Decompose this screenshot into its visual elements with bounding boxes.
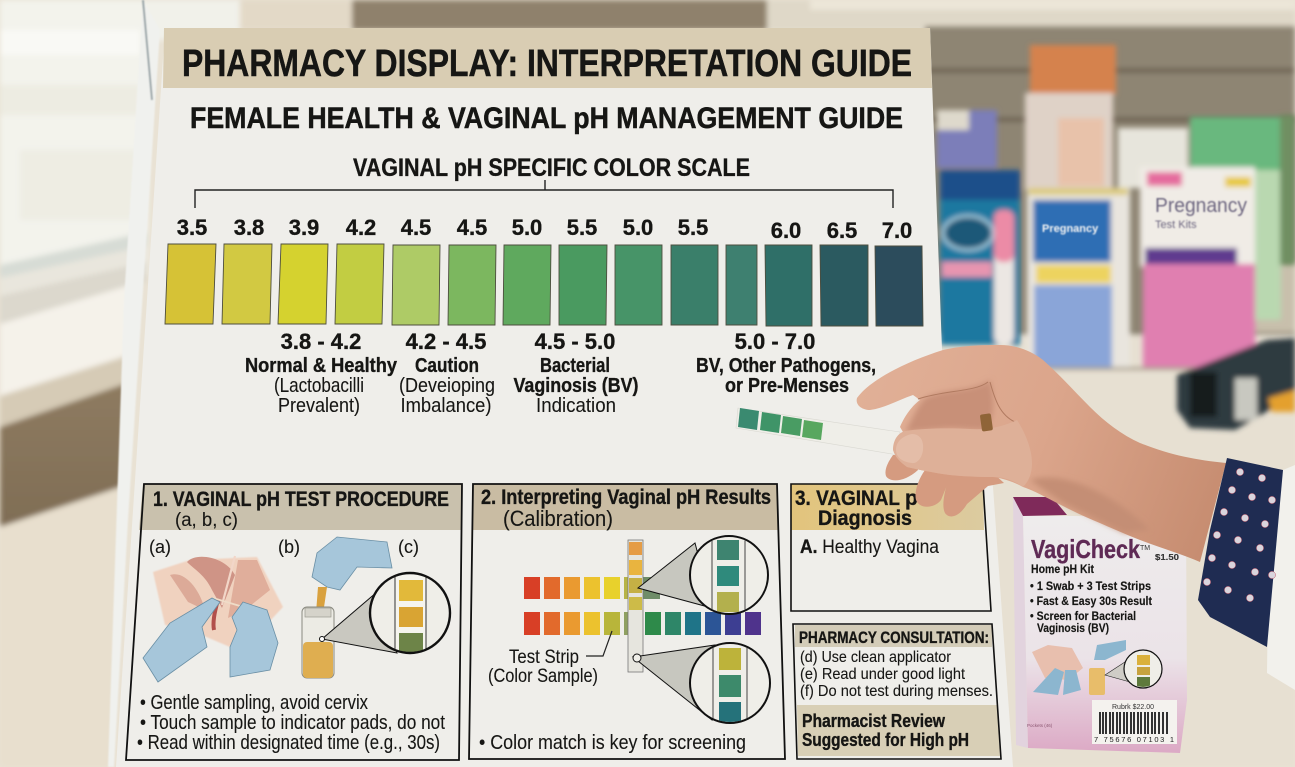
magnifier top: [638, 530, 768, 620]
thumbnail: [896, 434, 923, 463]
panel: pharmacy consultation: (e) Read under good light: [800, 666, 966, 683]
range: BV other pathogens: or Pre-Menses: [725, 375, 849, 397]
product box: VagiCheck: Home pH Kit: [1031, 564, 1094, 576]
display board: [116, 28, 1013, 767]
product box: VagiCheck: [1013, 497, 1187, 753]
panel 1: test procedure: • Read within designated time (e.g., 30s): [137, 732, 440, 754]
range: caution: [399, 329, 495, 417]
range: BV other pathogens: [696, 329, 876, 397]
crease shadows: [905, 380, 993, 432]
reference color rows: [524, 577, 761, 635]
pH values: 4.5: [401, 215, 431, 240]
icon: box illustration: [1032, 640, 1162, 695]
scanner: [1177, 338, 1295, 430]
pH values: 3.9: [289, 215, 319, 240]
pH values: 5.0: [512, 215, 542, 240]
range: caution: Imbalance): [400, 395, 492, 417]
panel 1: test procedure: 1. VAGINAL pH TEST PROCEDURE: [153, 488, 449, 511]
range: caution: (Deveioping: [399, 375, 495, 397]
pH values: 3.5: [177, 215, 207, 240]
palm and back of hand: [857, 345, 1226, 562]
blurred products on shelf: [937, 45, 1295, 430]
panel 1: test procedure: • Touch sample to indicator pads, do not: [140, 712, 445, 734]
pH values: 3.8: [234, 215, 264, 240]
range: bacterial vaginosis: 4.5 - 5.0: [535, 329, 615, 354]
panel 3: diagnosis: [791, 484, 991, 611]
label: test strip: [488, 631, 612, 687]
pH values: 6.5: [827, 218, 857, 243]
blurred shelf labels: Test Kits: [1155, 219, 1197, 231]
range: normal: (Lactobacilli: [274, 375, 364, 397]
wedding ring: [980, 413, 993, 432]
panel: pharmacy consultation: [793, 624, 1001, 759]
range: BV other pathogens: BV, Other Pathogens,: [696, 355, 876, 377]
thumb: [893, 420, 1032, 487]
panel 1: test procedure: (a): [149, 537, 171, 557]
range: bacterial vaginosis: Vaginosis (BV): [514, 375, 638, 397]
panel 1: test procedure: (b): [278, 537, 300, 557]
range: caution: Caution: [415, 355, 479, 377]
scale heading: VAGINAL pH SPECIFIC COLOR SCALE: [353, 154, 750, 182]
lower fingers: [885, 455, 1004, 516]
pH values: 6.0: [771, 218, 801, 243]
pH values: 5.5: [567, 215, 597, 240]
product box: VagiCheck: • Screen for Bacterial: [1030, 611, 1136, 623]
range: BV other pathogens: 5.0 - 7.0: [735, 329, 815, 354]
range: caution: 4.2 - 4.5: [406, 329, 486, 354]
range: normal: Prevalent): [278, 395, 360, 417]
blurred shelf labels: [1042, 195, 1247, 235]
bracket above scale: [195, 180, 893, 208]
product box: VagiCheck: VagiCheck: [1031, 534, 1140, 564]
label: test strip: (Color Sample): [488, 666, 598, 687]
icon: gloved hand and vial: [302, 537, 450, 678]
shirt cuff and sleeve: [1198, 458, 1295, 690]
panel 1: test procedure: (c): [398, 537, 419, 557]
magnifier bottom: [633, 640, 770, 725]
bullet list: • Gentle sampling, avoid cervix: [140, 692, 368, 714]
pH values: 4.2: [346, 215, 376, 240]
product box: VagiCheck: TM: [1140, 545, 1150, 552]
pH values: 5.0: [623, 215, 653, 240]
range: normal: [245, 329, 398, 417]
panel: pharmacy consultation: PHARMACY CONSULTATION:: [799, 629, 989, 647]
panel: pharmacy consultation: (f) Do not test during menses.: [800, 683, 993, 700]
range: bacterial vaginosis: Bacterial: [540, 355, 610, 377]
panel 2: interpreting results: 2. Interpreting Vaginal pH Results: [481, 486, 771, 509]
label: test strip: Test Strip: [509, 647, 579, 668]
barcode: 7 75676 07103 1: [1094, 735, 1174, 744]
sample test strip held: [736, 408, 900, 455]
product box: VagiCheck: • Fast & Easy 30s Result: [1030, 596, 1152, 608]
pH color scale: [165, 215, 923, 326]
icon: anatomy and gloved hands: [143, 556, 283, 682]
pH values: 7.0: [882, 218, 912, 243]
main title band: PHARMACY DISPLAY: INTERPRETATION GUIDE: [182, 43, 912, 85]
panel: pharmacy consultation: (d) Use clean applicator: [800, 649, 952, 666]
panel 1: test procedure: (a, b, c): [175, 510, 238, 531]
range: normal: 3.8 - 4.2: [281, 329, 361, 354]
acrylic stand edge: [108, 0, 160, 767]
range: normal: Normal & Healthy: [245, 355, 398, 377]
barcode: Rubrk $22.00: [1112, 704, 1154, 711]
panel 2: interpreting results: [469, 484, 785, 759]
finger outlines: [918, 382, 1015, 422]
panel 3: diagnosis: p: [905, 487, 918, 510]
panel: pharmacy consultation: Pharmacist Review: [802, 711, 946, 731]
panel: pharmacy consultation: Suggested for High pH: [802, 730, 969, 750]
product box: VagiCheck: Vaginosis (BV): [1037, 623, 1109, 635]
pH values: 4.5: [457, 215, 487, 240]
product box: VagiCheck: $1.50: [1155, 552, 1179, 562]
test strip: [628, 540, 643, 672]
blurred shelf labels: Pregnancy: [1155, 195, 1247, 217]
range: bacterial vaginosis: [514, 329, 638, 417]
panel 2: interpreting results: • Color match is key for screening: [479, 731, 746, 754]
color swatches: [165, 244, 923, 326]
panel 1: test procedure: [126, 484, 462, 760]
blurred shelf labels: Pregnancy: [1042, 223, 1099, 235]
main title band: [163, 28, 932, 88]
panel 3: diagnosis: A. Healthy Vagina: [800, 537, 939, 558]
hand holding strip: [857, 345, 1226, 562]
subtitle: FEMALE HEALTH & VAGINAL pH MANAGEMENT GUIDE: [190, 102, 903, 135]
range: bacterial vaginosis: Indication: [536, 395, 616, 417]
panel 3: diagnosis: Diagnosis: [818, 507, 912, 530]
panel 3: diagnosis: 3. VAGINAL: [795, 487, 900, 510]
pH values: 5.5: [678, 215, 708, 240]
pH values: [177, 215, 912, 243]
product box: VagiCheck: Pockets (46): [1027, 723, 1053, 728]
product box: VagiCheck: • 1 Swab + 3 Test Strips: [1030, 581, 1151, 593]
panel 2: interpreting results: (Calibration): [503, 506, 613, 531]
barcode: [1092, 700, 1177, 744]
